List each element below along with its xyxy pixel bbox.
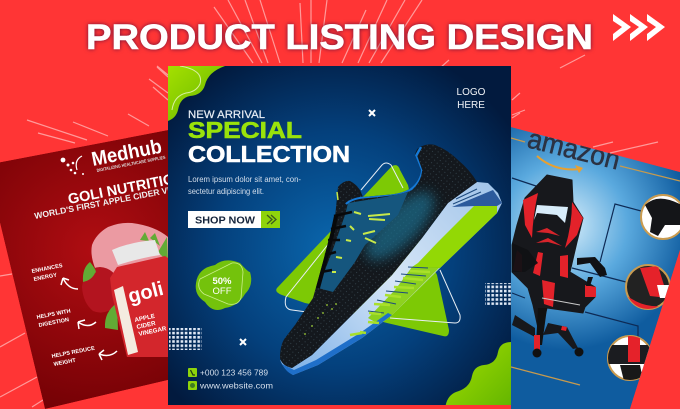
goli bottle: goli bbox=[126, 278, 166, 308]
detail circle: armrest bbox=[626, 265, 672, 312]
poster heading: WORLD'S FIRST APPLE CIDER VINEGAR bbox=[33, 179, 202, 221]
amazon logo bbox=[528, 134, 618, 173]
Medhub logo bbox=[61, 136, 166, 175]
lorem body text: sectetur adipiscing elit. bbox=[188, 187, 264, 196]
goli bottle bbox=[110, 240, 168, 357]
leaves bbox=[83, 232, 168, 330]
detail circle: headrest bbox=[641, 195, 680, 239]
contact details: www.website.com bbox=[199, 382, 273, 390]
dot grids bbox=[169, 328, 202, 350]
ad headline: NEW ARRIVAL bbox=[188, 109, 265, 121]
running shoe bbox=[280, 144, 502, 375]
poster heading: GOLI NUTRITION bbox=[67, 170, 186, 208]
benefit labels: ENHANCES bbox=[31, 263, 63, 275]
poster: Medhub goli nutrition bbox=[0, 130, 168, 409]
green wave corners bbox=[168, 66, 225, 121]
benefit labels bbox=[31, 263, 96, 368]
gaming chair bbox=[512, 175, 607, 358]
ad headline: SPECIAL bbox=[188, 117, 302, 143]
teal eyestay bbox=[318, 192, 408, 292]
goli bottle: APPLE bbox=[134, 313, 156, 324]
shop now button: SHOP NOW bbox=[195, 216, 256, 226]
lorem body text: Lorem ipsum dolor sit amet, con- bbox=[188, 175, 301, 184]
laces bbox=[318, 216, 336, 288]
gold rules bbox=[511, 138, 680, 385]
amazon logo: amazon bbox=[525, 123, 623, 176]
ad headline bbox=[188, 110, 349, 162]
poster: amazon gaming chair bbox=[511, 123, 680, 409]
contact details bbox=[188, 368, 273, 390]
apple bbox=[82, 267, 114, 312]
title: PRODUCT LISTING DESIGN bbox=[86, 18, 593, 57]
armrest bbox=[577, 257, 607, 277]
goli bottle: VINEGAR bbox=[138, 325, 168, 338]
contact details: +000 123 456 789 bbox=[200, 368, 268, 378]
50% off badge: 50% bbox=[212, 276, 232, 287]
teal speckle on mesh bbox=[360, 186, 440, 266]
toe speckles bbox=[304, 303, 337, 335]
upper bbox=[280, 144, 477, 368]
50% off badge bbox=[196, 260, 251, 310]
benefit labels: WEIGHT bbox=[53, 358, 77, 368]
Medhub logo: DIGITALIZING HEALTHCARE SUPPLIES bbox=[96, 155, 166, 173]
goli bottle: CIDER bbox=[136, 320, 157, 331]
benefit labels: HELPS REDUCE bbox=[51, 346, 96, 360]
ad headline: COLLECTION bbox=[188, 141, 350, 167]
curved arrows bbox=[61, 278, 117, 360]
panel: special collection ad bbox=[168, 66, 511, 409]
lorem body text bbox=[188, 175, 301, 196]
cross marks bbox=[240, 110, 375, 345]
logo here bbox=[457, 88, 485, 108]
connector lines bbox=[512, 178, 645, 340]
benefit labels: HELPS WITH bbox=[36, 308, 71, 321]
shop now button bbox=[188, 211, 280, 228]
juice splash bbox=[91, 222, 168, 273]
sole bbox=[280, 182, 502, 375]
logo here: HERE bbox=[457, 100, 485, 111]
yellow eyelets bbox=[332, 192, 390, 272]
chair base bbox=[512, 315, 578, 349]
green triangles behind shoe bbox=[276, 163, 460, 336]
logo here: LOGO bbox=[457, 87, 486, 98]
poster heading bbox=[34, 174, 168, 219]
chevron arrows bbox=[613, 14, 665, 41]
benefit labels: ENERGY bbox=[33, 273, 58, 283]
benefit labels: DIGESTION bbox=[38, 317, 70, 329]
detail circle: footrest bbox=[607, 335, 650, 381]
Medhub logo: Medhub bbox=[90, 136, 164, 171]
50% off badge: OFF bbox=[212, 286, 232, 297]
